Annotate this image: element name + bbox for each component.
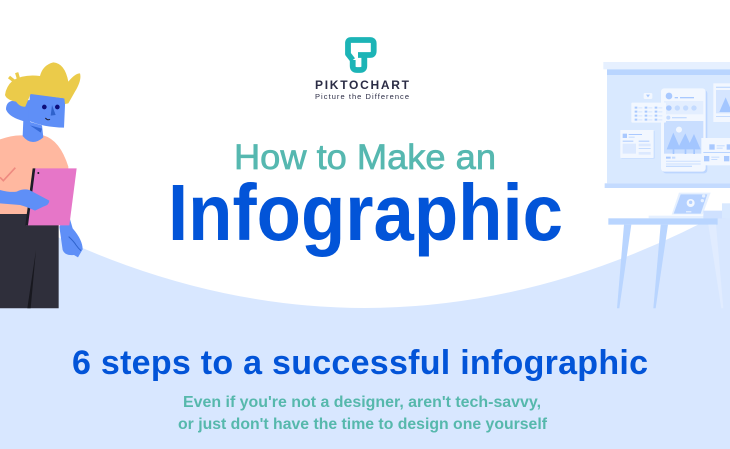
subtitle: 6 steps to a successful infographic (72, 344, 648, 382)
trousers (0, 213, 59, 308)
board top bar (603, 62, 730, 69)
article card (620, 130, 655, 159)
shirt (0, 135, 68, 214)
tablet (26, 168, 77, 225)
calendar card (631, 103, 671, 123)
mouth (45, 118, 50, 120)
logo: Piktochart (315, 40, 410, 101)
gallery card (701, 138, 730, 165)
face (28, 93, 65, 128)
character: person holding tablet (0, 62, 83, 308)
wordmark: PIKTOCHART (315, 78, 410, 92)
check mark (0, 168, 15, 181)
hair spikes (9, 73, 19, 82)
nose (51, 105, 56, 116)
board panel (607, 75, 730, 183)
description: Even if you're not a designer, aren't tech-savvy, (183, 394, 541, 411)
books (703, 203, 730, 218)
far arm (59, 213, 83, 257)
laptop (649, 193, 711, 218)
title: How to Make an: How to Make an (234, 138, 496, 177)
desk (608, 218, 723, 308)
ear (6, 100, 33, 123)
hair (5, 62, 80, 107)
near arm and hand (0, 189, 49, 211)
background curve (0, 208, 730, 449)
phone (661, 88, 707, 173)
neck (23, 120, 43, 142)
tagline: Picture the Difference (315, 92, 409, 101)
description (178, 394, 548, 433)
eyes (42, 105, 47, 109)
icon: P mark (348, 40, 374, 70)
description: or just don't have the time to design one yourself (178, 416, 548, 433)
heart bubble (644, 93, 652, 99)
title: Infographic: Infographic (168, 168, 563, 257)
right illustration: presentation board and desk (603, 62, 730, 308)
photo card (713, 83, 730, 122)
